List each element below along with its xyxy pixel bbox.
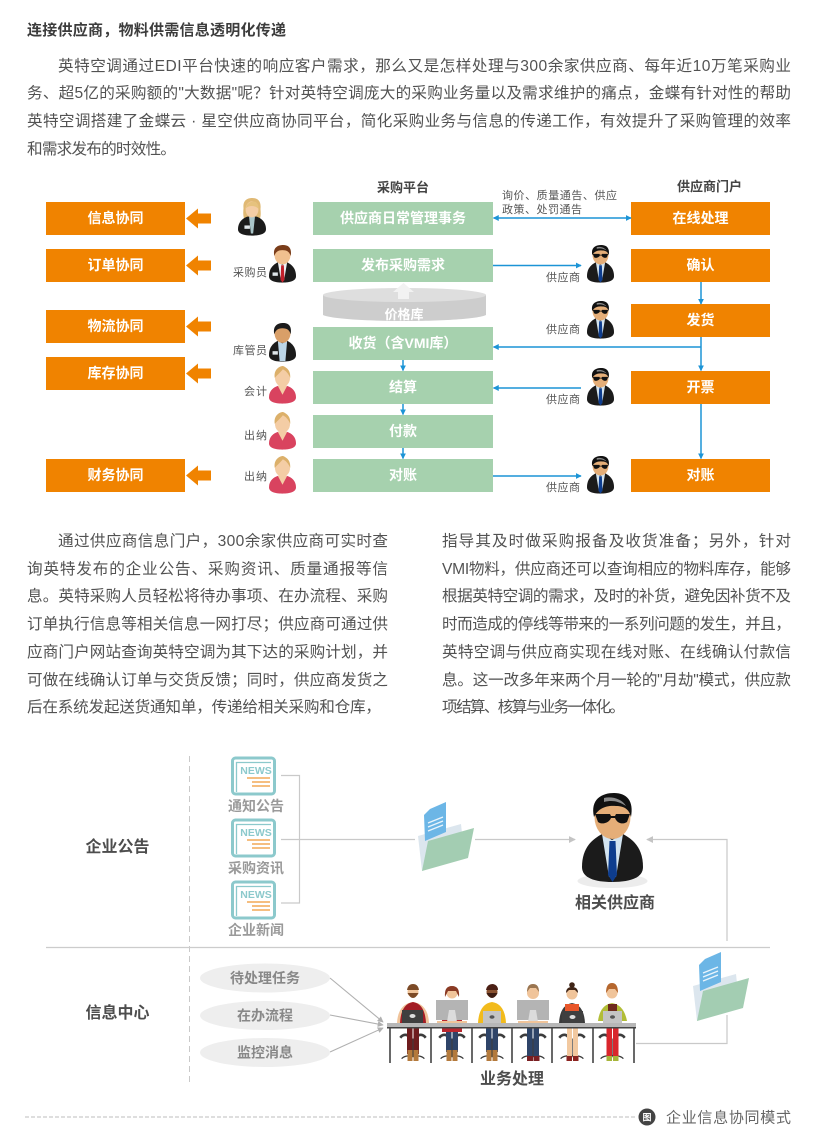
icon: news procurement [232, 820, 274, 856]
diagram: enterprise information collaboration [46, 756, 770, 1088]
icon: cashier [269, 412, 296, 450]
panel: procurement platform steps: 收货（含VMI库） [349, 335, 457, 351]
text block: right column [442, 532, 791, 716]
icon: news notice [232, 758, 274, 794]
panel: left collaboration boxes: 财务协同 [88, 467, 144, 483]
panel: procurement platform steps: 付款 [389, 423, 417, 439]
heading: procurement platform: 采购平台 [377, 180, 429, 195]
icon: supplier two [587, 301, 614, 339]
icon: blonde staff [238, 198, 266, 236]
worker one [397, 984, 429, 1061]
label: warehouse keeper: 库管员 [233, 343, 267, 357]
label: buyer: 采购员 [233, 265, 267, 279]
heading: enterprise notices: 企业公告 [85, 837, 150, 856]
icon: news procurement: NEWS [240, 827, 272, 839]
label: enterprise news: 企业新闻 [228, 922, 284, 938]
label: cashier: 出纳 [244, 428, 267, 442]
text block: left column: 通过供应商信息门户，300余家供应商可实时查 [58, 531, 388, 550]
icon: warehouse keeper [269, 323, 296, 362]
panel: procurement platform steps: 供应商日常管理事务 [340, 210, 466, 226]
icon: cashier two [269, 456, 296, 494]
icon: supplier three [587, 368, 614, 406]
panel: left collaboration boxes: 库存协同 [88, 365, 144, 381]
text block: left column: 可做在线确认订单与交货反馈；同时，供应商发货之 [27, 670, 388, 689]
arrows: grey connectors [281, 776, 727, 1044]
text block: right column: 根据英特空调的需求，及时的补货，避免因补货不及 [442, 587, 791, 605]
text block: intro paragraph [27, 56, 791, 158]
panel: left collaboration boxes: 订单协同 [88, 257, 144, 273]
panel: supplier portal steps: 对账 [686, 467, 714, 483]
panel: procurement platform steps: 结算 [389, 379, 417, 395]
text block: left column: 订单执行信息等相关信息一网打尽；供应商可通过供 [27, 614, 388, 633]
icon: buyer [269, 245, 296, 283]
panel: information centre items [200, 964, 330, 1067]
panel: supplier portal steps: 开票 [686, 379, 714, 395]
label: business processing: 业务处理 [480, 1069, 544, 1088]
arrows: blue flow connectors [403, 218, 701, 476]
icon: folder top [418, 802, 474, 871]
panel: left collaboration boxes: 物流协同 [88, 318, 144, 334]
worker two [436, 986, 468, 1061]
icon: news notice: NEWS [240, 765, 272, 777]
icon: supplier four [587, 456, 614, 494]
heading: supplier portal: 供应商门户 [677, 179, 742, 194]
panel: procurement platform steps: 对账 [389, 467, 417, 483]
text block: left column [27, 531, 388, 716]
panel: supplier portal steps [631, 202, 770, 492]
label: notices sent to suppliers [502, 188, 617, 216]
text block: left column: 询英特发布的企业公告、采购资讯、质量通报等信 [27, 560, 388, 578]
text block: right column: 指导其及时做采购报备及收货准备；另外，针对 [442, 532, 791, 550]
label: supplier four: 供应商 [546, 480, 580, 494]
text block: right column: VMI物料，供应商还可以查询相应的物料库存，能够 [442, 559, 791, 578]
text block: right column: 项结算、核算与业务一体化。 [442, 697, 625, 716]
panel: information centre items: 在办流程 [237, 1008, 293, 1024]
label: supplier one: 供应商 [546, 270, 580, 284]
icons: orange left arrows [186, 208, 211, 486]
desk [387, 1023, 636, 1063]
label: notices sent to suppliers: 询价、质量通告、供应 [502, 188, 617, 202]
label: notices sent to suppliers: 政策、处罚通告 [502, 202, 582, 216]
text block: intro paragraph: 和需求发布的时效性。 [27, 140, 176, 158]
label: procurement news: 采购资讯 [228, 860, 284, 876]
worker five [559, 982, 585, 1061]
icon: supplier one [587, 245, 614, 283]
text block: left column: 息。英特采购人员轻松将待办事项、在办流程、采购 [27, 587, 388, 605]
panel: supplier portal steps: 确认 [686, 257, 714, 273]
icon: folder bottom [693, 952, 749, 1021]
worker six [598, 983, 627, 1061]
panel: left collaboration boxes: 信息协同 [88, 210, 144, 226]
panel: information centre items: 监控消息 [237, 1044, 293, 1060]
panel: information centre items: 待处理任务 [230, 970, 300, 986]
icon: news enterprise: NEWS [240, 889, 272, 901]
caption: figure title: 企业信息协同模式 [666, 1108, 791, 1126]
flow chart: procurement collaboration [46, 179, 770, 494]
panel: supplier portal steps: 在线处理 [672, 210, 728, 226]
title: 连接供应商，物料供需信息透明化传递 [27, 21, 286, 39]
icon: news enterprise [232, 882, 274, 918]
label: related suppliers: 相关供应商 [575, 893, 655, 912]
icon: price database: 价格库 [384, 307, 424, 322]
arrows: items to workers [330, 978, 383, 1052]
text block: right column: 息。这一改多年来两个月一轮的"月劫"模式，供应款 [442, 670, 791, 689]
text block: intro paragraph: 务、超5亿的采购额的"大数据"呢？针对英特空调庞大的采购业务量以及需求维护的痛点，金蝶有针对性的帮助 [27, 84, 791, 102]
panel: left collaboration boxes [46, 202, 185, 492]
worker three [478, 984, 506, 1061]
text block: intro paragraph: 英特空调搭建了金蝶云 · 星空供应商协同平台，简化采购业务与信息的传递工作，有效提升了采购管理的效率 [27, 111, 791, 130]
label: supplier three: 供应商 [546, 392, 580, 406]
icon: price database [323, 283, 486, 322]
label: supplier two: 供应商 [546, 322, 580, 336]
panel: procurement platform steps [313, 202, 493, 492]
icon: supplier large [578, 793, 648, 888]
text block: right column: 英特空调与供应商实现在线对账、在线确认付款信 [442, 642, 791, 661]
text block: intro paragraph: 英特空调通过EDI平台快速的响应客户需求，那么又是怎样处理与300余家供应商、每年近10万笔采购业 [58, 56, 791, 75]
text block: right column: 时而造成的停线等带来的一系列问题的发生，并且， [442, 615, 791, 633]
label: accountant: 会计 [244, 385, 267, 398]
text block: left column: 后在系统发起送货通知单，传递给相关采购和仓库， [27, 698, 381, 716]
heading: information centre: 信息中心 [85, 1003, 150, 1022]
worker four [517, 984, 549, 1061]
label: notices: 通知公告 [228, 798, 284, 814]
panel: supplier portal steps: 发货 [686, 312, 714, 328]
icon: accountant [269, 366, 296, 404]
caption: figure title [25, 1108, 791, 1126]
illustration: workers at desk [387, 982, 636, 1063]
label: cashier two: 出纳 [244, 469, 267, 483]
caption: figure title: 图 [642, 1112, 652, 1122]
panel: procurement platform steps: 发布采购需求 [361, 257, 445, 273]
text block: left column: 应商门户网站查询英特空调为其下达的采购计划，并 [27, 642, 388, 661]
